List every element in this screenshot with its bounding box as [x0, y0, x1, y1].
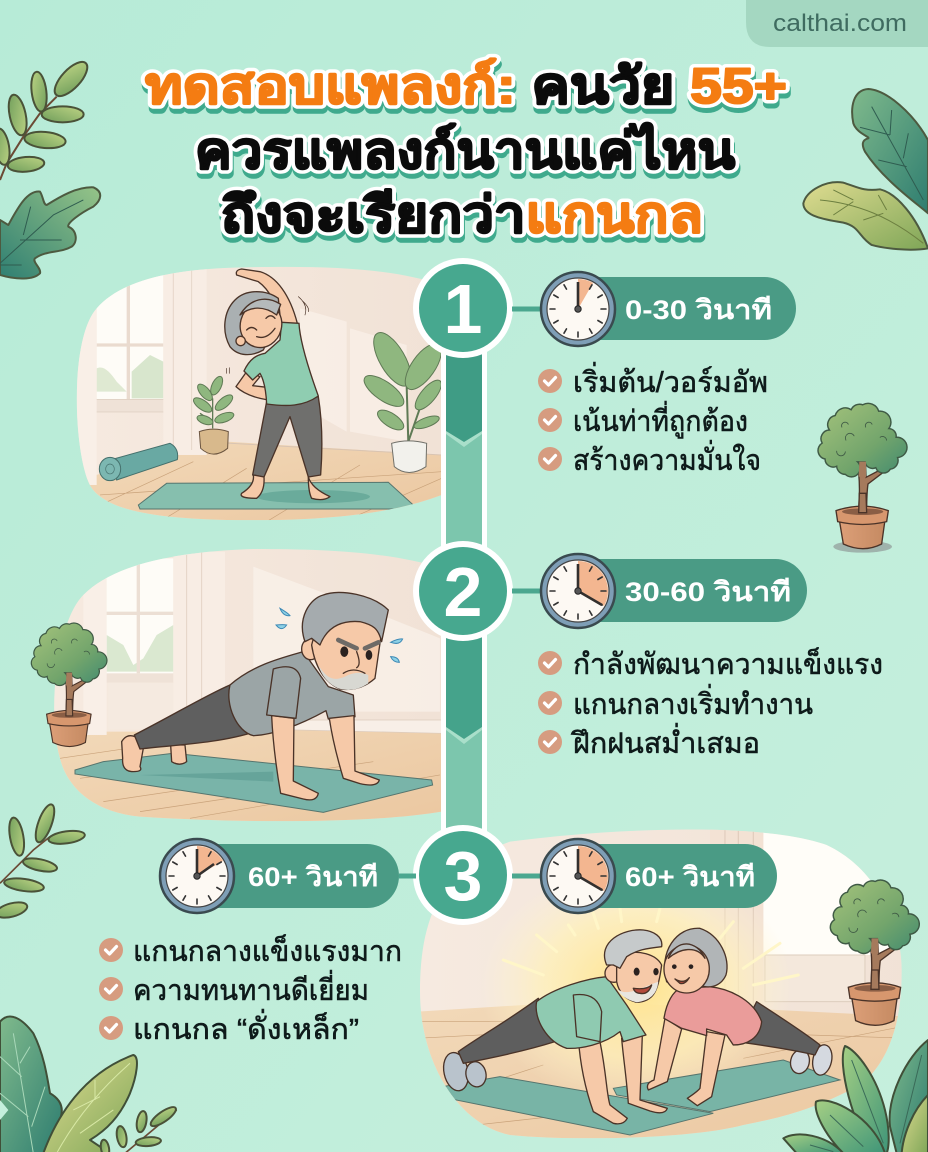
step 3 duration pill left: [160, 839, 416, 913]
step 3 checklist: [99, 933, 402, 1046]
icon: potted tree: [830, 880, 919, 1025]
website badge: calthai.com: [773, 10, 907, 37]
icon: clock 60 plus left: [160, 839, 234, 913]
title: ควรแพลงก์นานแค่ไหน: [195, 122, 735, 179]
title: ควรแพลงก์นานแค่ไหน: [195, 122, 735, 179]
title: [145, 58, 787, 243]
step 3 number badge: [413, 825, 513, 925]
step 1 checklist: เน้นท่าที่ถูกต้อง: [573, 401, 748, 439]
icon: bottom-left big leaves: [0, 1016, 178, 1152]
step 2 duration pill: 30-60 วินาที: [625, 577, 791, 607]
icon: potted tree: [31, 623, 107, 747]
timeline column: [441, 340, 487, 860]
step 2 number badge: [413, 541, 513, 641]
icon: top-right leaves: [803, 89, 928, 250]
icon: left leaf sprig: [0, 802, 86, 921]
figure: woman in plank with pink shirt: [647, 928, 835, 1106]
step 3 checklist: ความทนทานดีเยี่ยม: [133, 970, 369, 1007]
website badge: [746, 0, 928, 47]
step 2 checklist: ฝึกฝนสม่ำเสมอ: [571, 723, 760, 760]
title: ถึงจะเรียกว่า แกนกล: [221, 187, 703, 243]
step 3 duration pill right: [512, 839, 777, 913]
illustration: couple doing plank: [410, 825, 928, 1152]
icon: bottom-right big leaves: [783, 1040, 928, 1152]
step 2 checklist: แกนกลางเริ่มทำงาน: [573, 684, 813, 721]
step 2 checklist: [538, 646, 883, 760]
step 1 number badge: 1: [444, 270, 482, 348]
step 1 duration pill: [512, 272, 796, 346]
icon: potted tree right: [818, 403, 907, 553]
step 1 checklist: สร้างความมั่นใจ: [573, 440, 761, 477]
step 3 number badge: 3: [444, 837, 482, 915]
step 2 number badge: 2: [444, 553, 482, 631]
illustration: woman side stretch: [60, 265, 448, 525]
illustration: man doing plank: [31, 545, 443, 825]
icon: clock 60 plus right: [541, 839, 615, 913]
step 2 duration pill: [512, 554, 807, 628]
step 1 checklist: [538, 362, 768, 477]
step 3 checklist: แกนกลางแข็งแรงมาก: [133, 933, 402, 968]
figure: woman stretching: [225, 269, 330, 500]
step 3 duration pill right: 60+ วินาที: [625, 862, 755, 892]
step 3 duration pill left: 60+ วินาที: [248, 862, 378, 892]
step 1 checklist: เริ่มต้น/วอร์มอัพ: [573, 362, 768, 399]
step 1 number badge: [413, 258, 513, 358]
icon: clock 0-30: [541, 272, 615, 346]
title: ทดสอบแพลงก์: คนวัย 55+: [145, 58, 787, 114]
step 2 checklist: กำลังพัฒนาความแข็งแรง: [573, 646, 883, 681]
step 1 duration pill: 0-30 วินาที: [625, 295, 772, 325]
figure: man in plank with green shirt: [440, 930, 667, 1124]
figure: man in plank: [122, 592, 403, 800]
title: ทดสอบแพลงก์: คนวัย 55+: [145, 58, 787, 114]
icon: clock 30-60: [541, 554, 615, 628]
step 3 checklist: แกนกล “ดั่งเหล็ก”: [133, 1009, 359, 1046]
title: ถึงจะเรียกว่า แกนกล: [221, 187, 703, 243]
icon: top-left leaf sprig and oak leaf: [0, 57, 100, 279]
